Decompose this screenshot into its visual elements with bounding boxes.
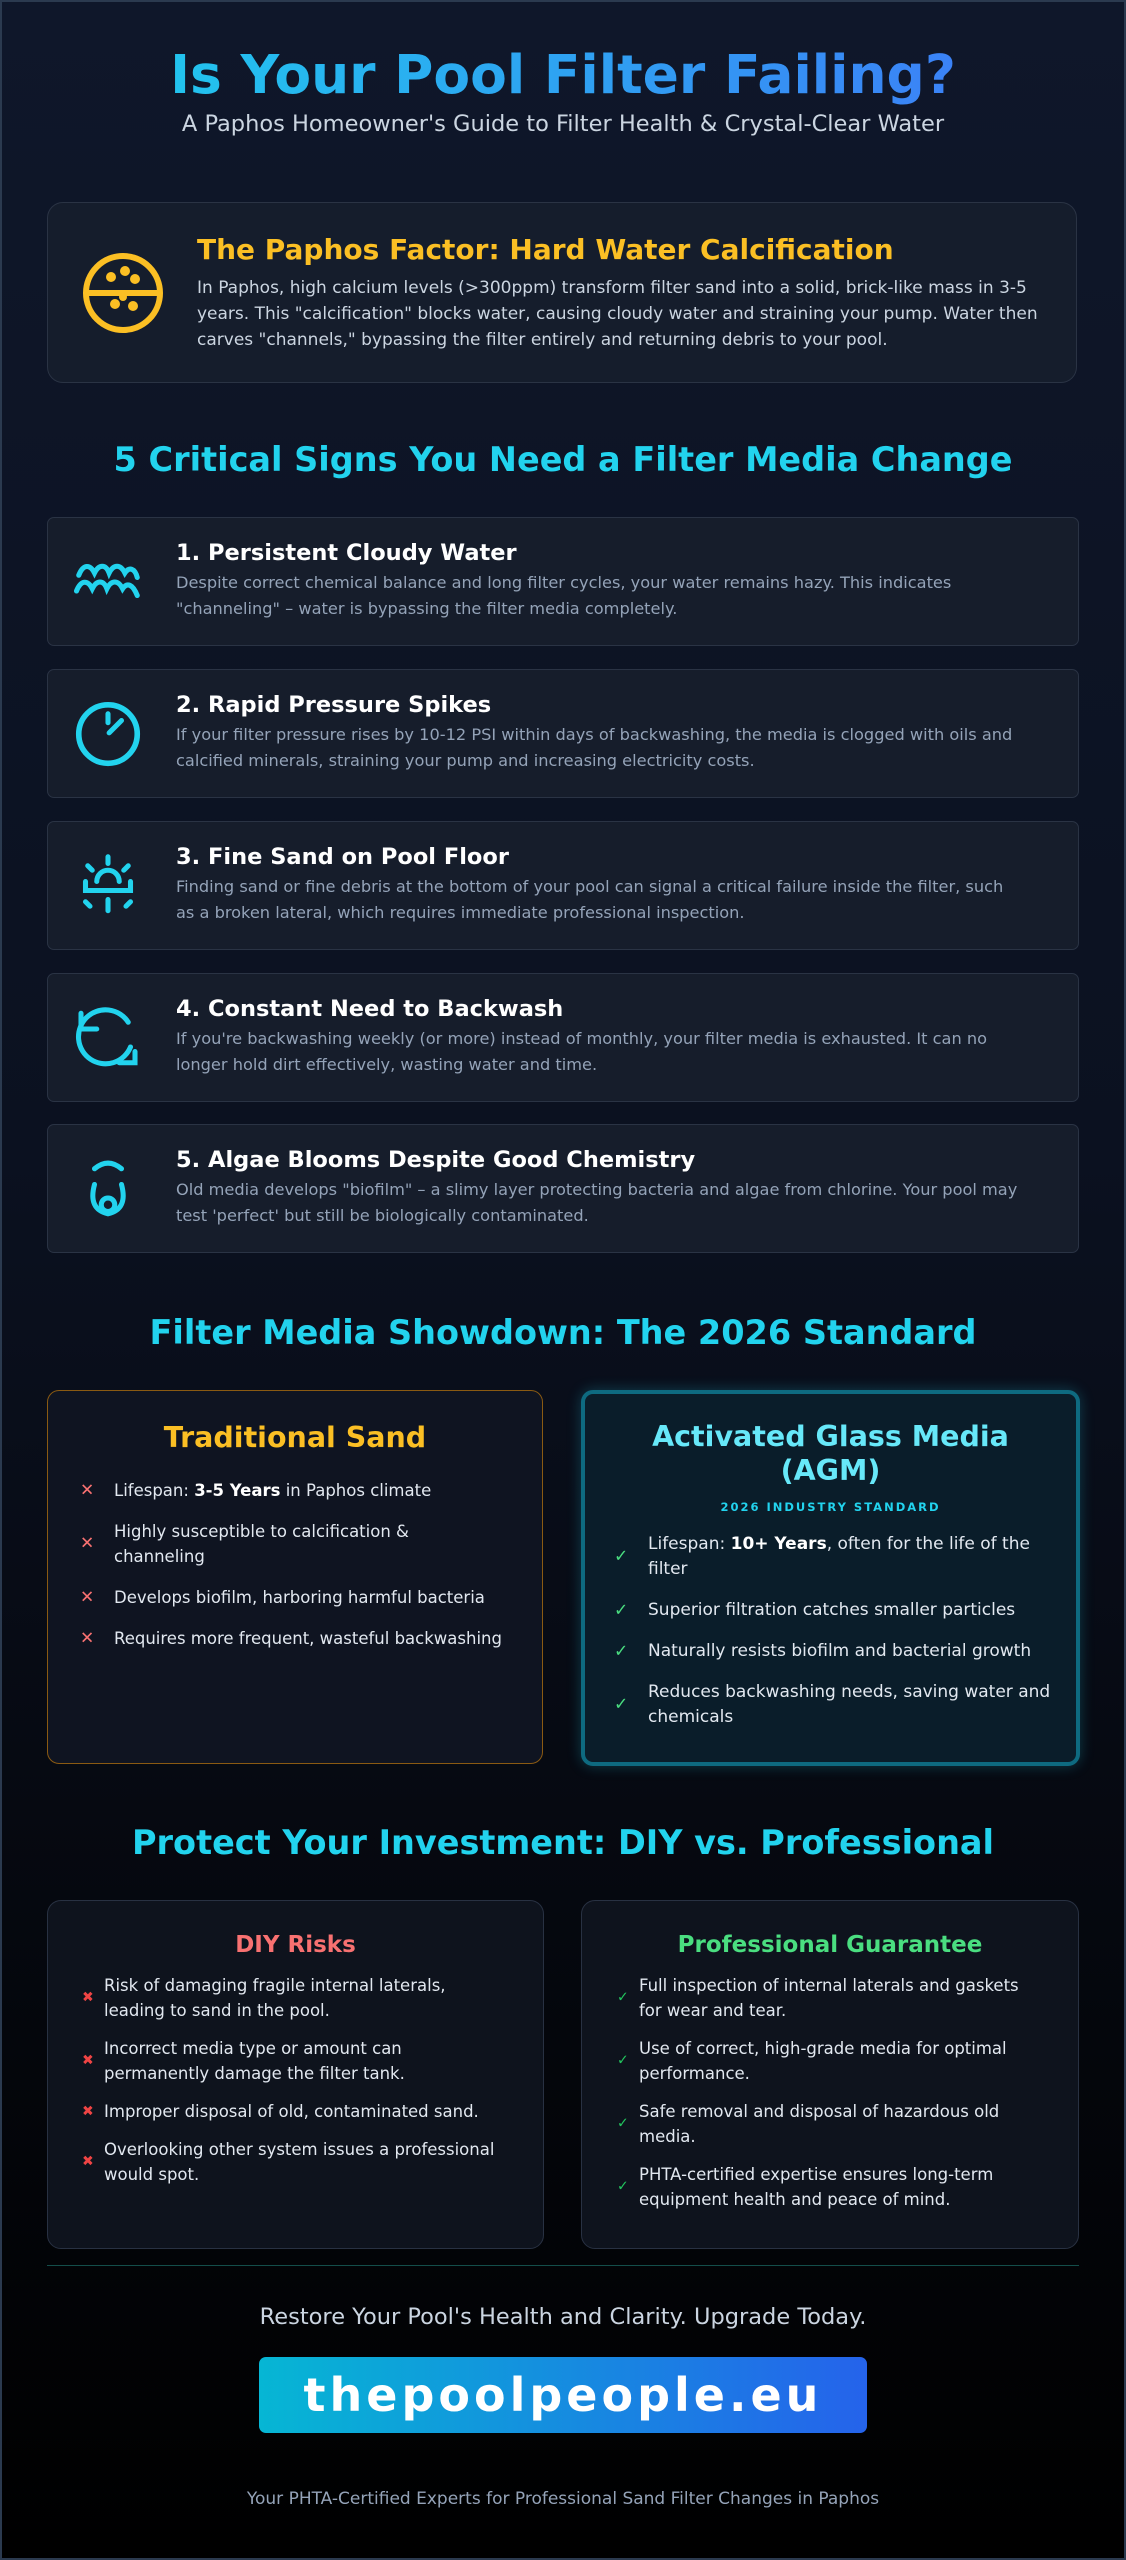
call to action text: Restore Your Pool's Health and Clarity. Upgrade Today.: [260, 2304, 866, 2330]
card: sign 1: [47, 517, 1079, 646]
heading: showdown: Filter Media Showdown: The 2026 Standard: [149, 1313, 976, 1352]
panel: activated glass media: [581, 1390, 1080, 1766]
list: sand cons: Highly susceptible to calcification &: [114, 1522, 409, 1541]
subtitle: A Paphos Homeowner's Guide to Filter Health & Crystal-Clear Water: [182, 111, 944, 137]
panel: traditional sand: ✕: [80, 1480, 94, 1500]
card: sign 2: 2. Rapid Pressure Spikes: [176, 692, 491, 718]
list: DIY risks: Risk of damaging fragile internal laterals, leading to sand in the pool.: [104, 1976, 446, 2020]
list: sand cons: channeling: [114, 1547, 205, 1566]
list: sand cons: Requires more frequent, wasteful backwashing: [114, 1629, 502, 1648]
heading: AGM: [652, 1420, 1009, 1487]
panel: professional guarantee: ✓: [617, 2052, 629, 2068]
icon: algae: [90, 1160, 126, 1216]
card: sign 4: [47, 973, 1079, 1102]
card: sign 5: 5. Algae Blooms Despite Good Chemistry: [176, 1147, 695, 1173]
heading: professional: Professional Guarantee: [678, 1932, 982, 1958]
list: AGM pros: Reduces backwashing needs, saving water and chemicals: [648, 1682, 1050, 1727]
panel: professional guarantee: [581, 1900, 1079, 2249]
list: DIY risks: Improper disposal of old, contaminated sand.: [104, 2102, 479, 2121]
heading: 5 signs: 5 Critical Signs You Need a Filter Media Change: [114, 440, 1012, 479]
list: DIY risks: would spot.: [104, 2165, 199, 2184]
card: sign 1: 1. Persistent Cloudy Water: [176, 540, 517, 566]
panel: paphos factor: [47, 202, 1077, 383]
list: AGM pros: Naturally resists biofilm and bacterial growth: [648, 1641, 1031, 1661]
heading: The Paphos Factor: Hard Water Calcification: [197, 233, 894, 266]
list: DIY risks: [82, 1976, 494, 2184]
list: professional benefits: [617, 1976, 1019, 2209]
card: sign 4: If you're backwashing weekly (or more) instead of monthly, your filter media is exhausted. It can no longer hold dirt effectively, wasting water and time.: [176, 1029, 987, 1074]
panel: DIY risks: ✖: [82, 2103, 94, 2119]
panel: traditional sand: ✕: [80, 1587, 94, 1607]
list: sand cons: Lifespan: 3-5 Years in Paphos climate: [114, 1481, 431, 1500]
list: AGM pros: Lifespan: 10+ Years, often for the life of the filter: [648, 1534, 1030, 1579]
panel: traditional sand: ✕: [80, 1534, 94, 1554]
badge: 2026 standard: 2026 INDUSTRY STANDARD: [720, 1500, 941, 1514]
panel: DIY risks: ✖: [82, 2154, 94, 2170]
list: sand cons: Develops biofilm, harboring harmful bacteria: [114, 1588, 485, 1607]
panel: DIY risks: [47, 1900, 544, 2249]
panel: DIY risks: ✖: [82, 2052, 94, 2068]
icon: sand: [82, 854, 134, 914]
icon: pressure gauge: [76, 702, 140, 766]
card: sign 1: Despite correct chemical balance and long filter cycles, your water remains hazy. This indicates "channeling" – water is bypassing the filter media completely.: [176, 573, 951, 618]
list: DIY risks: Incorrect media type or amount can permanently damage the filter tank.: [104, 2039, 405, 2083]
heading: AGM: (AGM): [781, 1454, 880, 1487]
card: sign 3: 3. Fine Sand on Pool Floor: [176, 844, 509, 870]
panel: professional guarantee: ✓: [617, 1990, 629, 2006]
panel: professional guarantee: ✓: [617, 2116, 629, 2132]
card: sign 5: [47, 1124, 1079, 1253]
panel: activated glass media: ✓: [614, 1546, 628, 1566]
card: sign 5: Old media develops "biofilm" – a slimy layer protecting bacteria and algae from chlorine. Your pool may test 'perfect' but still be biologically contaminated.: [176, 1180, 1017, 1225]
heading: DIY: DIY Risks: [235, 1932, 356, 1958]
heading: DIY vs professional: Protect Your Investment: DIY vs. Professional: [132, 1823, 994, 1862]
card: sign 2: [47, 669, 1079, 798]
card: sign 3: Finding sand or fine debris at the bottom of your pool can signal a critical failure inside the filter, such as a broken lateral, which requires immediate professional inspection.: [176, 877, 1003, 922]
panel: traditional sand: [47, 1390, 543, 1764]
panel: activated glass media: ✓: [614, 1694, 628, 1714]
icon: backwash cycle: [76, 1007, 138, 1066]
heading: AGM: Activated Glass Media: [652, 1420, 1009, 1453]
heading: sand: Traditional Sand: [164, 1421, 426, 1454]
title: Is Your Pool Filter Failing?: [170, 43, 956, 106]
panel: professional guarantee: ✓: [617, 2178, 629, 2194]
footnote: Your PHTA-Certified Experts for Professional Sand Filter Changes in Paphos: [247, 2489, 879, 2509]
list: professional benefits: Safe removal and disposal of hazardous old media.: [639, 2102, 999, 2146]
list: professional benefits: Full inspection of internal laterals and gaskets for wear and tear.: [639, 1976, 1019, 2020]
icon: calcification: [83, 253, 163, 333]
card: sign 3: [47, 821, 1079, 950]
list: DIY risks: Overlooking other system issues a professional: [104, 2140, 494, 2159]
panel: DIY risks: ✖: [82, 1990, 94, 2006]
button: website: [259, 2357, 867, 2433]
panel: activated glass media: ✓: [614, 1641, 628, 1661]
panel: traditional sand: ✕: [80, 1628, 94, 1648]
body text: In Paphos, high calcium levels (>300ppm) transform filter sand into a solid, brick-like mass in 3-5 years. This "calcification" blocks water, causing cloudy water and straining your pump. Water then carves "channels," bypassing the filter entirely and returning debris to your pool.: [197, 278, 1038, 350]
list: AGM pros: [614, 1534, 1050, 1727]
panel: activated glass media: ✓: [614, 1600, 628, 1620]
icon: cloudy water: [74, 564, 140, 598]
card: sign 4: 4. Constant Need to Backwash: [176, 996, 563, 1022]
button: website: thepoolpeople.eu: [304, 2368, 822, 2422]
list: professional benefits: Use of correct, high-grade media for optimal performance.: [639, 2039, 1007, 2083]
list: AGM pros: Superior filtration catches smaller particles: [648, 1600, 1015, 1620]
list: professional benefits: PHTA-certified expertise ensures long-term equipment health and peace of mind.: [639, 2165, 993, 2209]
card: sign 2: If your filter pressure rises by 10-12 PSI within days of backwashing, the media is clogged with oils and calcified minerals, straining your pump and increasing electricity costs.: [176, 725, 1012, 770]
list: sand cons: [80, 1480, 502, 1648]
